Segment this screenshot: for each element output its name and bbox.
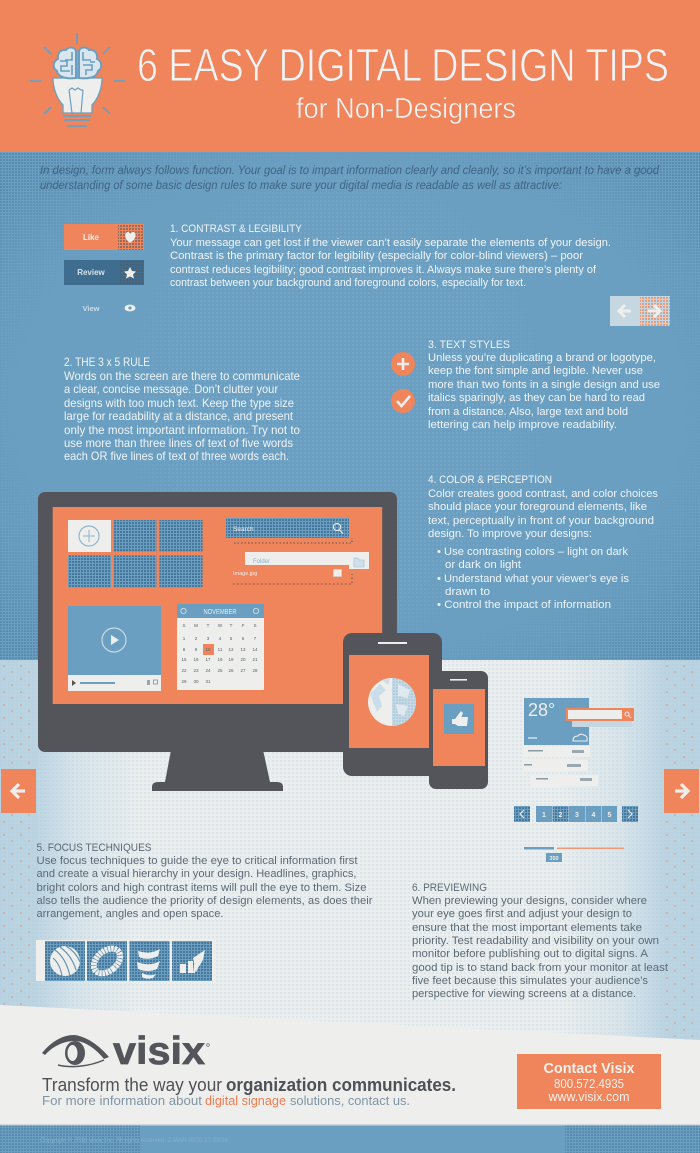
- calendar: 27: [240, 668, 246, 673]
- section 5: focus techniques: Use focus techniques to guide the eye to critical information first: [36, 855, 358, 867]
- calendar: 26: [228, 668, 234, 673]
- calendar: 25: [217, 668, 223, 673]
- contact box: 800.572.4935: [554, 1077, 624, 1091]
- calendar: T: [230, 623, 233, 628]
- arrow buttons: previous and next: [610, 296, 670, 326]
- section 4: color and perception: should place your foreground elements, like: [428, 501, 647, 513]
- intro text: [40, 164, 660, 192]
- calendar: 6: [242, 636, 245, 641]
- calendar: 16: [193, 657, 199, 662]
- contact box: www.visix.com: [548, 1090, 630, 1104]
- widget search field: [566, 708, 634, 727]
- calendar: 2: [195, 636, 198, 641]
- section 3: text styles: [428, 339, 660, 431]
- calendar: S: [253, 623, 257, 628]
- icon: thumbs up: [444, 704, 474, 734]
- section 4: color and perception: design. To improve your designs:: [428, 528, 592, 540]
- pagination: 4: [592, 812, 596, 819]
- section 2: the 3 x 5 rule: only the most important information. Try not to: [64, 424, 300, 437]
- section 3: text styles: lettering can help improve readability.: [428, 419, 617, 431]
- tablet: [343, 633, 442, 776]
- calendar: W: [218, 623, 223, 628]
- pagination: 3: [575, 812, 579, 819]
- section 6: previewing: your eye goes first and adjust your design to: [412, 908, 632, 920]
- section 5: focus techniques: and create a visual hierarchy in your design. Headlines, graphics,: [36, 868, 356, 880]
- weather widget: [522, 698, 598, 786]
- calendar: 18: [217, 657, 223, 662]
- section 1: contrast and legibility: 1. CONTRAST & LEGIBILITY: [170, 223, 302, 235]
- section 3: text styles: 3. TEXT STYLES: [428, 339, 510, 351]
- contact line: solutions, contact us.: [290, 1093, 410, 1108]
- calendar: 9: [195, 647, 198, 652]
- subtitle: for Non-Designers: [296, 93, 516, 125]
- slider: [524, 847, 624, 862]
- section 3: text styles: from a distance. Also, large text and bold: [428, 406, 628, 418]
- section 2: the 3 x 5 rule: designs with too much text. Keep the type size: [64, 397, 294, 410]
- section 1: contrast and legibility: Your message can get lost if the viewer can’t easily separate the elements of your design.: [170, 237, 611, 249]
- pagination: [514, 806, 638, 822]
- calendar: F: [242, 623, 245, 628]
- calendar: 24: [205, 668, 211, 673]
- buttons: like, review, view: View: [83, 304, 100, 313]
- section 4: color and perception: Color creates good contrast, and color choices: [428, 488, 658, 500]
- section 2: the 3 x 5 rule: use more than three lines of text of five words: [64, 437, 293, 450]
- section 3: text styles: Unless you’re duplicating a brand or logotype,: [428, 352, 656, 364]
- pagination: 5: [608, 812, 612, 819]
- section 2: the 3 x 5 rule: Words on the screen are there to communicate: [64, 370, 300, 383]
- section 1: contrast and legibility: Contrast is the primary factor for legibility (especially for color-blind viewers) – poor: [170, 250, 583, 262]
- calendar: 5: [230, 636, 233, 641]
- folder field: Image.jpg: [233, 571, 257, 577]
- calendar: 22: [181, 668, 187, 673]
- section 6: previewing: 6. PREVIEWING: [412, 882, 487, 894]
- calendar: 20: [240, 657, 246, 662]
- section 6: previewing: monitor before publishing out to digital signs. A: [412, 948, 648, 960]
- icon: sphere: [50, 946, 80, 976]
- section 6: previewing: five feet because this simulates your audience’s: [412, 975, 648, 987]
- section 4: color and perception: • Understand what your viewer’s eye is: [437, 573, 629, 585]
- tagline: Transform the way your: [42, 1074, 222, 1095]
- section 3: text styles: keep the font simple and legible. Never use: [428, 365, 643, 377]
- right arrow tab: [664, 769, 699, 813]
- section 6: previewing: perspective for viewing screens at a distance.: [412, 988, 636, 1000]
- section 1: contrast and legibility: [170, 223, 611, 289]
- folder field: Folder: [253, 559, 270, 565]
- tile grid: [68, 520, 202, 588]
- calendar: 7: [254, 636, 257, 641]
- calendar: 1: [183, 636, 186, 641]
- section 2: the 3 x 5 rule: [64, 356, 300, 463]
- section 6: previewing: When previewing your designs, consider where: [412, 895, 647, 907]
- section 6: previewing: good tip is to stand back from your monitor at least: [412, 962, 669, 974]
- calendar: 19: [228, 657, 234, 662]
- icon: ring: [89, 944, 125, 978]
- section 5: focus techniques: also tells the audience the priority of design elements, as does their: [36, 895, 373, 907]
- phone: [429, 671, 488, 789]
- pagination: 1: [542, 812, 546, 819]
- calendar: 10: [205, 647, 211, 652]
- globe: [368, 678, 416, 726]
- section 2: the 3 x 5 rule: large for readability at a distance, and present: [64, 410, 294, 423]
- buttons: like, review, view: Like: [83, 233, 100, 242]
- section 6: previewing: priority. Test readability and visibility on your own: [412, 935, 659, 947]
- section 4: color and perception: • Use contrasting colors – light on dark: [437, 546, 628, 558]
- section 4: color and perception: drawn to: [445, 586, 490, 598]
- contact box: [517, 1054, 661, 1109]
- section 6: previewing: ensure that the most important elements take: [412, 922, 642, 934]
- contact line: For more information about: [42, 1093, 202, 1108]
- pagination: 2: [559, 812, 563, 819]
- icon: rising arrow: [180, 950, 205, 973]
- section 3: text styles: more than two fonts in a single design and use: [428, 379, 660, 391]
- buttons: like, review, view: [64, 224, 144, 313]
- calendar: 4: [219, 636, 222, 641]
- tagline: organization communicates.: [226, 1074, 456, 1095]
- section 2: the 3 x 5 rule: each OR five lines of text of three words each.: [64, 450, 289, 463]
- section 1: contrast and legibility: contrast between your background and foreground colors, especially for text.: [170, 277, 526, 289]
- buttons: like, review, view: Review: [77, 268, 106, 277]
- calendar: 8: [183, 647, 186, 652]
- calendar: 11: [218, 647, 223, 652]
- tagline: [42, 1074, 456, 1095]
- section 4: color and perception: [428, 474, 658, 611]
- section 6: previewing: [412, 882, 669, 1000]
- contact box: Contact Visix: [544, 1061, 634, 1077]
- monitor: [38, 492, 397, 791]
- calendar: 28: [252, 668, 258, 673]
- contact line: [42, 1093, 410, 1108]
- calendar: 29: [181, 679, 187, 684]
- calendar: 14: [252, 647, 258, 652]
- calendar: [177, 604, 264, 690]
- folder field: [233, 552, 369, 584]
- section 3: text styles: italics sparingly, as they can be hard to read: [428, 392, 645, 404]
- calendar: NOVEMBER: [204, 609, 236, 616]
- copyright: Copyright © 2016 Visix, Inc. All rights reserved. 2-MAR-0000-17-09/16: [40, 1136, 228, 1144]
- intro text: In design, form always follows function. Your goal is to impart information clearly and cleanly, so it’s important to have a good: [40, 164, 660, 177]
- calendar: 15: [181, 657, 187, 662]
- section 2: the 3 x 5 rule: a clear, concise message. Don’t clutter your: [64, 383, 278, 396]
- section 4: color and perception: or dark on light: [445, 559, 522, 571]
- contact line: digital signage: [205, 1093, 286, 1108]
- calendar: 3: [207, 636, 210, 641]
- header band: [0, 0, 700, 152]
- search bar: Search: [233, 526, 254, 533]
- visix logo: [42, 1030, 209, 1073]
- icon: stacked bands: [137, 949, 160, 979]
- section 4: color and perception: • Control the impact of information: [437, 599, 611, 611]
- calendar: 13: [240, 647, 246, 652]
- icons: plus and check circles: [391, 352, 415, 413]
- search bar: [226, 518, 352, 543]
- calendar: 23: [193, 668, 199, 673]
- section 4: color and perception: text, perceptually in front of your background: [428, 515, 654, 527]
- section 5: focus techniques: [36, 842, 373, 920]
- calendar: 30: [193, 679, 199, 684]
- calendar: 21: [252, 657, 258, 662]
- section 2: the 3 x 5 rule: 2. THE 3 x 5 RULE: [64, 356, 150, 369]
- visix logo: visix: [113, 1030, 205, 1073]
- section 4: color and perception: 4. COLOR & PERCEPTION: [428, 474, 552, 486]
- intro text: understanding of some basic design rules to make sure your digital media is readable as well as attractive:: [40, 179, 562, 192]
- section 5: focus techniques: bright colors and high contrast items will pull the eye to them. Size: [36, 882, 366, 894]
- section 5: focus techniques: 5. FOCUS TECHNIQUES: [36, 842, 152, 854]
- calendar: 17: [205, 657, 211, 662]
- calendar: T: [207, 623, 210, 628]
- calendar: S: [182, 623, 186, 628]
- slider: 350: [549, 856, 559, 862]
- video player: [68, 606, 161, 691]
- section 5: focus techniques: arrangement, angles and open space.: [36, 908, 224, 920]
- calendar: 31: [205, 679, 211, 684]
- weather widget: 28°: [528, 700, 555, 720]
- icon: light bulb with brain: [30, 33, 125, 126]
- left arrow tab: [1, 769, 36, 813]
- calendar: M: [194, 623, 198, 628]
- icon tiles: [36, 940, 216, 981]
- section 1: contrast and legibility: contrast reduces legibility; good contrast improves it. Always make sure there’s plenty of: [170, 264, 597, 276]
- calendar: 12: [228, 647, 234, 652]
